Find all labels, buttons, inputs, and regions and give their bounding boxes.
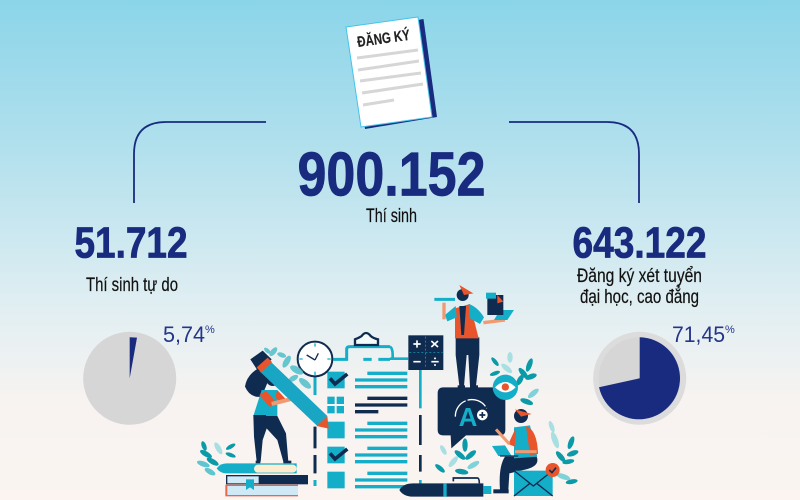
wall clock: [298, 342, 332, 376]
student with telescope: [434, 285, 514, 388]
leaves behind pencil: [263, 346, 313, 391]
left percentage: 5,74: [163, 322, 205, 347]
right connector line: [509, 122, 639, 203]
right label: [577, 266, 702, 308]
total number: 900.152: [298, 140, 486, 210]
left percentage: %: [205, 324, 215, 336]
clipboard right edge: [390, 347, 420, 487]
right number: 643.122: [572, 218, 706, 268]
right percentage: 71,45: [672, 322, 725, 347]
giant pen: [399, 478, 491, 497]
left connector line: [134, 122, 266, 203]
illustration: left half: [196, 333, 390, 496]
icon: registration document: [346, 17, 437, 129]
calculator: [408, 335, 443, 370]
left number: 51.712: [74, 218, 188, 268]
envelope with check badge: [514, 463, 560, 496]
right label: đại học, cao đẳng: [580, 286, 699, 308]
speech bubble grade: A: [459, 402, 478, 432]
checklist rows: [327, 372, 390, 488]
plant beside books: [196, 441, 236, 477]
clipboard: [315, 333, 390, 486]
plant behind speech bubble: [489, 352, 540, 406]
seated student with laptop: [492, 409, 538, 493]
book stack: [217, 463, 308, 496]
illustration: right half: [390, 285, 579, 497]
plants at base: [434, 438, 480, 475]
woman holding pencil: [245, 368, 294, 463]
giant pencil: [250, 351, 329, 429]
icon: registration document: ĐĂNG KÝ: [356, 26, 411, 51]
eye badge: [493, 375, 518, 400]
right pie chart: [593, 332, 686, 425]
speech bubble grade: [438, 387, 505, 448]
left label: Thí sinh tự do: [86, 275, 178, 296]
plant right: [547, 420, 579, 485]
right percentage: %: [725, 324, 735, 336]
total label: Thí sinh: [366, 206, 417, 227]
right label: Đăng ký xét tuyển: [577, 266, 702, 287]
left pie chart: [83, 332, 176, 425]
